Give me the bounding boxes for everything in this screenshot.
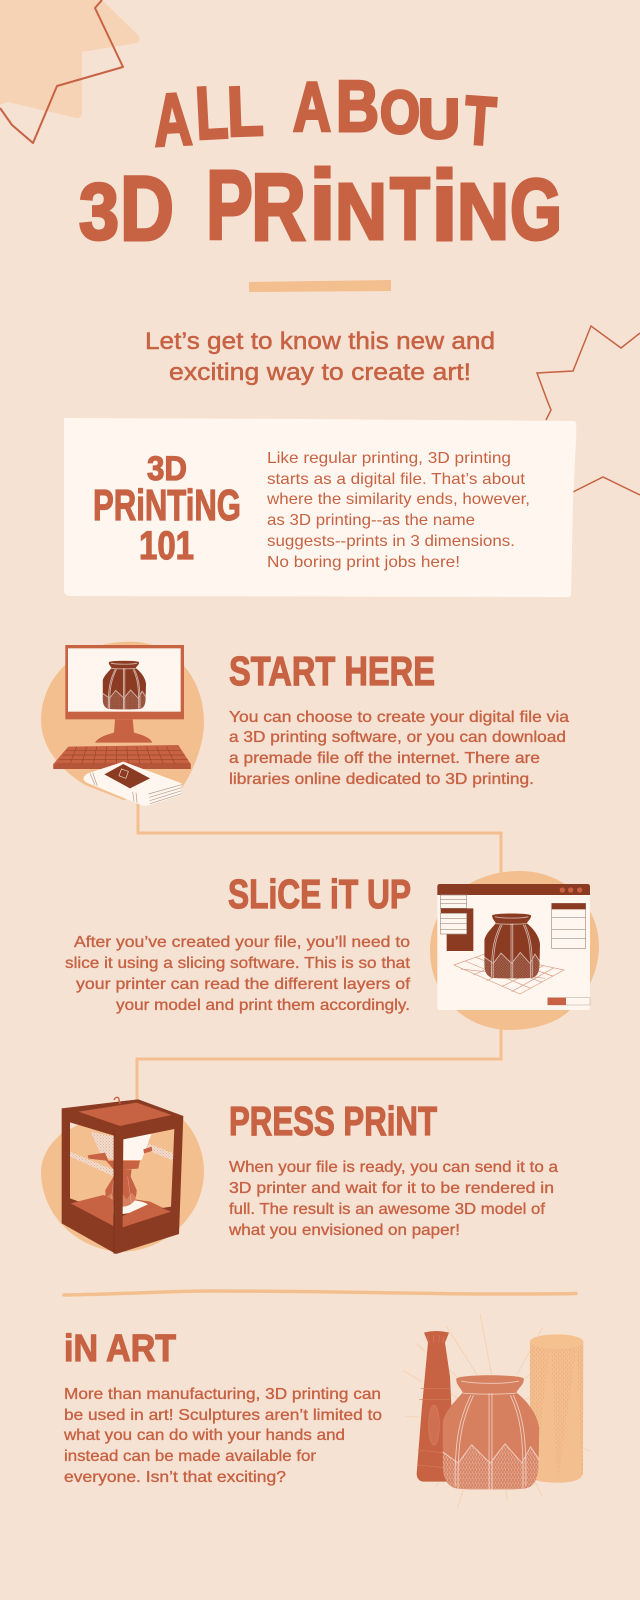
text: press print description: 3D printer and wait for it to be rendered in (229, 1180, 554, 1197)
heading: 3D Printing 101: 101 (139, 524, 194, 568)
heading: Slice It Up: SLiCE iT UP (228, 871, 411, 917)
decoration: right outline star (537, 326, 640, 495)
text: start here description (229, 709, 569, 788)
icon: 3D printer (41, 1097, 204, 1254)
text: slice it up description (65, 934, 411, 1014)
keyboard (53, 745, 191, 769)
text: 101 description: as 3D printing--as the name (267, 512, 475, 529)
title (79, 67, 562, 261)
text: 101 description: starts as a digital file. That’s about (267, 471, 526, 488)
subtitle: exciting way to create art! (169, 359, 471, 386)
heading: Press Print: PRESS PRiNT (229, 1098, 437, 1144)
monitor (65, 645, 184, 743)
text: in art description (63, 1386, 382, 1486)
title line: ALL ABOUT: U (418, 87, 460, 150)
title line: 3D PRINTING: N (457, 167, 509, 256)
text: in art description: More than manufacturing, 3D printing can (64, 1386, 381, 1403)
heading: 3D Printing 101: PRiNTiNG (93, 481, 241, 530)
text: slice it up description: your model and print them accordingly. (116, 997, 410, 1014)
left panels (440, 895, 473, 951)
text: 101 description: suggests--prints in 3 dimensions. (267, 533, 515, 550)
text: 101 description: No boring print jobs here! (267, 554, 460, 571)
title line: 3D PRINTING: N (335, 167, 387, 256)
title line: 3D PRINTING (79, 149, 562, 261)
title line: ALL ABOUT: L (226, 72, 265, 151)
text: in art description: be used in art! Sculptures aren’t limited to (64, 1407, 382, 1424)
book (83, 762, 182, 806)
heading: Start Here: START HERE (229, 648, 435, 694)
heading: In Art: iN ART (64, 1328, 176, 1370)
title line: ALL ABOUT: A (151, 77, 194, 162)
text: 101 description: where the similarity ends, however, (266, 491, 530, 508)
text: press print description (228, 1159, 558, 1239)
cylinder (530, 1334, 583, 1483)
title line: 3D PRINTING: 3 (79, 167, 119, 256)
text: start here description: You can choose to create your digital file via (229, 709, 569, 726)
title line: 3D PRINTING: i (431, 150, 458, 261)
text: start here description: libraries online dedicated to 3D printing. (229, 771, 534, 788)
icon: slicing software window (430, 871, 599, 1030)
text: press print description: what you envisioned on paper! (228, 1222, 460, 1239)
text: start here description: a premade file off the internet. There are (229, 750, 540, 767)
text: 101 description: Like regular printing, 3D printing (267, 450, 511, 467)
printer frame (62, 1097, 183, 1254)
icon: computer with book (41, 642, 204, 806)
divider (64, 1291, 576, 1295)
title line: ALL ABOUT: L (193, 70, 230, 155)
subtitle: Let’s get to know this new and (145, 328, 495, 355)
text: slice it up description: your printer can read the different layers of (76, 976, 411, 993)
connector line between steps (137, 800, 501, 1110)
title bar (437, 884, 590, 895)
title line: ALL ABOUT (151, 67, 498, 162)
panel: 3D printing 101 (64, 418, 576, 597)
accent bar under title (249, 280, 391, 292)
progress bar (548, 998, 590, 1005)
title line: ALL ABOUT: T (462, 82, 498, 160)
text: start here description: a 3D printing software, or you can download (229, 729, 566, 746)
main vase (443, 1375, 539, 1490)
text: slice it up description: After you’ve created your file, you’ll need to (74, 934, 410, 951)
title line: 3D PRINTING: G (510, 162, 562, 258)
title line: 3D PRINTING: D (120, 158, 174, 260)
title line: ALL ABOUT: B (336, 67, 379, 147)
illustration: art vases (403, 1313, 591, 1508)
text: 101 description (266, 450, 530, 571)
text: in art description: everyone. Isn’t that exciting? (64, 1469, 286, 1486)
bottle (417, 1331, 455, 1482)
heading: 3D Printing 101 (93, 450, 241, 568)
print head and vase (68, 1132, 173, 1227)
subtitle (145, 328, 495, 386)
sunburst rays (403, 1313, 591, 1508)
heading: 3D Printing 101: 3D (147, 450, 187, 488)
text: slice it up description: slice it using a slicing software. This is so that (65, 955, 411, 972)
title line: ALL ABOUT: A (293, 68, 331, 146)
right panel (552, 903, 586, 948)
decoration: top-left star shape (0, 0, 140, 143)
title line: ALL ABOUT: O (380, 79, 420, 146)
text: press print description: full. The result is an awesome 3D model of (229, 1201, 546, 1218)
title line: 3D PRINTING: i (309, 149, 336, 260)
text: in art description: instead can be made available for (64, 1448, 317, 1465)
build plate grid (454, 953, 564, 994)
text: press print description: When your file is ready, you can send it to a (229, 1159, 558, 1176)
title line: 3D PRINTING: T (390, 159, 430, 258)
title line: 3D PRINTING: R (251, 154, 306, 261)
title line: 3D PRINTING: P (206, 150, 253, 260)
text: in art description: what you can do with your hands and (63, 1427, 345, 1444)
